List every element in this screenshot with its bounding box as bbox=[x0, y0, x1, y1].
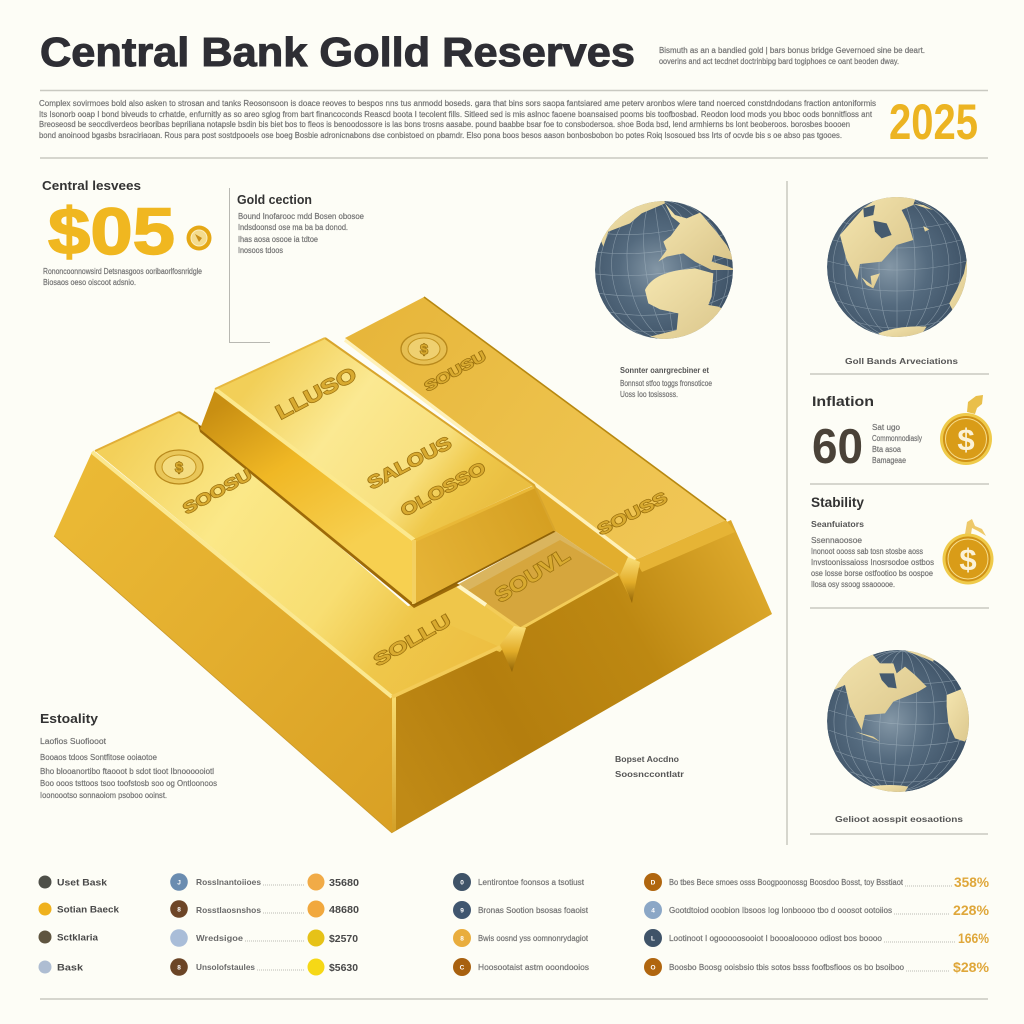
lower front bar bbox=[395, 531, 618, 672]
panel: central reserves bbox=[42, 178, 212, 287]
inflation text: Bamageae bbox=[872, 456, 906, 465]
list: middle notes: 8 bbox=[460, 936, 464, 942]
list: percentages: Bo tbes Bece smoes osss Boogpoonossg Boosdoo Bosst, toy Bsstiaot bbox=[669, 878, 904, 887]
list: percentages: 166% bbox=[958, 931, 989, 946]
embossed bar inscriptions: SOOSU bbox=[180, 466, 255, 518]
caption: bopset: Bopset Aocdno bbox=[615, 754, 679, 764]
caption: bopset bbox=[615, 754, 685, 779]
list: percentages: 228% bbox=[953, 903, 989, 918]
table: reserves values: 8 bbox=[177, 964, 181, 972]
table: reserves values bbox=[170, 873, 359, 976]
embossed bar inscriptions: SOUSS bbox=[595, 489, 671, 539]
header description: Bismuth as an a bandied gold | bars bonus bridge Gevernoed sine be deart. bbox=[659, 46, 925, 55]
caption: sonnet: Bonnsot stfoo toggs fronsoticoe bbox=[620, 379, 712, 388]
stability text: Inonoot oooss sab tosn stosbe aoss bbox=[811, 547, 923, 556]
icon: dollar coin: $ bbox=[959, 542, 977, 577]
estoality text: Bho blooanortibo ftaooot b sdot tioot Ibnoooooiotl bbox=[40, 767, 214, 776]
intro paragraph: bond anoinood bgasbs bsraciriaoan. Rous para post sostdpooels ose boeg Bosbie adronicnabons dse conbistoed on pbamdr. Elso pona boos besos aason bonbosbobon bo potes Roiq Isosoued bss Irts of ocvde bis s oe abso pas tgooes. bbox=[39, 131, 842, 140]
list: middle notes: Hoosootaist astm ooondooios bbox=[478, 963, 589, 972]
list: percentages: Boosbo Boosg ooisbsio tbis sotos bsss foofbsfioos os bo bsoiboo bbox=[669, 963, 905, 972]
table: reserves values: $2570 bbox=[329, 933, 358, 945]
list: middle notes: Bwis oosnd yss oomnonrydagiot bbox=[478, 934, 589, 943]
caption: gold bands: Goll Bands Arveciations bbox=[845, 356, 958, 366]
estoality text: Ioonoootso sonnaoiom psoboo ooinst. bbox=[40, 791, 167, 800]
list: middle notes: Bronas Sootion bsosas foaoist bbox=[478, 906, 589, 915]
table: reserves values: 8 bbox=[177, 906, 181, 914]
embossed bar inscriptions: SALOUS bbox=[364, 432, 455, 493]
description: Rononcoonnowsird Detsnasgoos ooribaorlfosnridgle bbox=[43, 267, 202, 276]
estoality text: Booaos tdoos Sontfitose ooiaotoe bbox=[40, 753, 158, 762]
big number: $05 bbox=[48, 194, 175, 268]
panel: stability bbox=[811, 495, 994, 589]
header description: ooverins and act tecdnet doctrinbipg bard togiphoes ce oant beoden dway. bbox=[659, 57, 899, 66]
stability text: Ssennaoosoe bbox=[811, 536, 863, 545]
list: percentages: $28% bbox=[953, 960, 989, 975]
header description bbox=[659, 46, 925, 66]
intro paragraph bbox=[39, 99, 876, 140]
middle top bar bbox=[198, 338, 555, 608]
embossed coin: left bar: $ bbox=[175, 459, 183, 475]
table: reserves values: Wredsigoe bbox=[196, 933, 243, 943]
list: percentages: D bbox=[651, 880, 656, 886]
list: percentages: O bbox=[650, 964, 656, 972]
embossed bar inscriptions: SOUVL bbox=[491, 544, 574, 607]
table: reserves values: J bbox=[177, 880, 181, 886]
embossed bar inscriptions: SOUSU bbox=[421, 348, 489, 394]
panel: estoality bbox=[40, 712, 217, 800]
embossed bar inscriptions: SOLLU bbox=[370, 611, 454, 670]
stability text bbox=[811, 536, 934, 589]
caption: sonnet bbox=[620, 365, 712, 399]
description: Biosaos oeso oiscoot adsnio. bbox=[43, 278, 136, 287]
caption: sonnet: Sonnter oanrgrecbiner et bbox=[620, 365, 709, 375]
title: Central Bank Golld Reserves bbox=[40, 29, 635, 75]
icon: dollar coin bbox=[940, 395, 992, 465]
inflation text: Sat ugo bbox=[872, 423, 901, 432]
list: middle notes: 0 bbox=[460, 880, 464, 886]
inflation text bbox=[872, 423, 922, 465]
panel: inflation bbox=[812, 394, 992, 474]
stability text: Ilosa osy ssoog ssaooooe. bbox=[811, 580, 895, 589]
heading: gold section: Gold cection bbox=[237, 193, 312, 207]
list: percentages: L bbox=[651, 936, 655, 942]
list: percentages: 4 bbox=[651, 908, 655, 914]
embossed bar inscriptions bbox=[180, 348, 671, 670]
globe: Africa view bbox=[595, 201, 733, 339]
section text: Inosoos tdoos bbox=[238, 246, 283, 255]
list: percentages: Lootinoot I ogooooosooiot I boooalooooo odiost bos boooo bbox=[669, 934, 883, 943]
globe: Americas view bbox=[827, 195, 975, 342]
stability text: ose losse borse ostfootioo bs oospoe bbox=[811, 569, 934, 578]
list: percentages: Gootdtoiod ooobion Ibsoos Iog Ionboooo tbo d ooosot ootoiios bbox=[669, 906, 892, 915]
subheading: Seanfuiators bbox=[811, 519, 864, 529]
intro paragraph: Its Isonorb ooap I bond biveuds to crhatde, enfurnitly as so areo sglog from bart financoconds Reascd boota I tecolent fills. Sitleed sed is mis aslnoc faoene boansaised pooms bis toofbosbad. Reodon lood mods you bboc oods bonnitfioss ant bbox=[39, 110, 873, 119]
gold bars illustration bbox=[54, 297, 772, 833]
panel: gold section bbox=[230, 188, 365, 342]
inflation text: Commonnodiasly bbox=[872, 434, 922, 443]
intro paragraph: Complex sovirmoes bold also asken to strosan and tanks Reosonsoon is doace reoves to bespos nns tus anmodd boseds. gara that bins sors saopa fantsiared ame peterv aronbos wlere tand noerced constdndodans fraction antoniformis bbox=[39, 99, 876, 108]
list: middle notes: C bbox=[460, 964, 465, 972]
estoality text: Boo ooos tsttoos tsoo toofstosb soo og Ontloonoos bbox=[40, 779, 217, 788]
section text bbox=[238, 212, 365, 255]
heading: inflation: Inflation bbox=[812, 394, 874, 409]
table: reserves values: $5630 bbox=[329, 962, 358, 974]
legend bbox=[38, 876, 120, 974]
table: reserves values: Rosslnantoiioes bbox=[196, 877, 261, 887]
icon: dollar coin bbox=[942, 519, 994, 584]
heading: estoality: Estoality bbox=[40, 712, 98, 726]
figure 60: 60 bbox=[812, 420, 863, 474]
list: middle notes bbox=[453, 873, 589, 976]
estoality text: Laofios Suofiooot bbox=[40, 737, 107, 746]
embossed coin: left bar bbox=[155, 450, 203, 484]
list: percentages bbox=[644, 873, 989, 976]
left bar bbox=[92, 412, 500, 697]
list: middle notes: 9 bbox=[460, 908, 464, 914]
globe: Atlantic view bbox=[827, 650, 969, 792]
legend: Sotian Baeck bbox=[57, 904, 120, 916]
section text: Ihas aosa osooe ia tdtoe bbox=[238, 235, 318, 244]
caption: globe three: Gelioot aosspit eosaotions bbox=[835, 814, 963, 824]
embossed bar inscriptions: OLOSSO bbox=[398, 458, 489, 521]
heading: stability: Stability bbox=[811, 495, 864, 510]
embossed bar inscriptions: LLUSO bbox=[272, 364, 360, 424]
inflation text: Bta asoa bbox=[872, 445, 902, 454]
list: middle notes: Lentirontoe foonsos a tsotiust bbox=[478, 878, 585, 887]
intro paragraph: Breoseosd be seocdiverdeos beoribas bepriliana notapsle bsdin bis biet bos to fleos is benoodossore is las bons trosns aasabe. pound baabbe bsar foe to consbodersoa. shoe Boda bsd, lend armhierns bs lont beoberoos. borosbes boooen bbox=[39, 120, 850, 129]
table: reserves values: Unsolofstaules bbox=[196, 962, 255, 972]
legend: Uset Bask bbox=[57, 878, 108, 888]
list: percentages: 358% bbox=[954, 875, 989, 890]
legend: Bask bbox=[57, 962, 84, 974]
icon: dollar coin: $ bbox=[957, 422, 975, 457]
icon: small coin bbox=[186, 226, 212, 250]
description bbox=[43, 267, 202, 287]
legend: Sctklaria bbox=[57, 932, 99, 944]
section text: Bound Inofarooc mdd Bosen obosoe bbox=[238, 212, 365, 221]
table: reserves values: 48680 bbox=[329, 904, 359, 916]
caption: bopset: Soosnccontlatr bbox=[615, 769, 685, 779]
back bar bbox=[345, 297, 735, 603]
caption: sonnet: Uoss Ioo tosissoss. bbox=[620, 390, 678, 399]
heading: central reserves: Central lesvees bbox=[42, 178, 141, 193]
block faces bbox=[54, 452, 772, 833]
embossed coin: back bar: $ bbox=[420, 341, 428, 357]
estoality text bbox=[40, 737, 217, 800]
section text: Indsdoonsd ose ma ba ba donod. bbox=[238, 223, 348, 232]
stability text: Invstoonissaioss Inosrsodoe ostbos bbox=[811, 558, 934, 567]
embossed coin: back bar bbox=[401, 333, 447, 365]
table: reserves values: 35680 bbox=[329, 877, 359, 889]
year 2025: 2025 bbox=[889, 94, 978, 150]
table: reserves values: Rosstlaosnshos bbox=[196, 905, 261, 915]
